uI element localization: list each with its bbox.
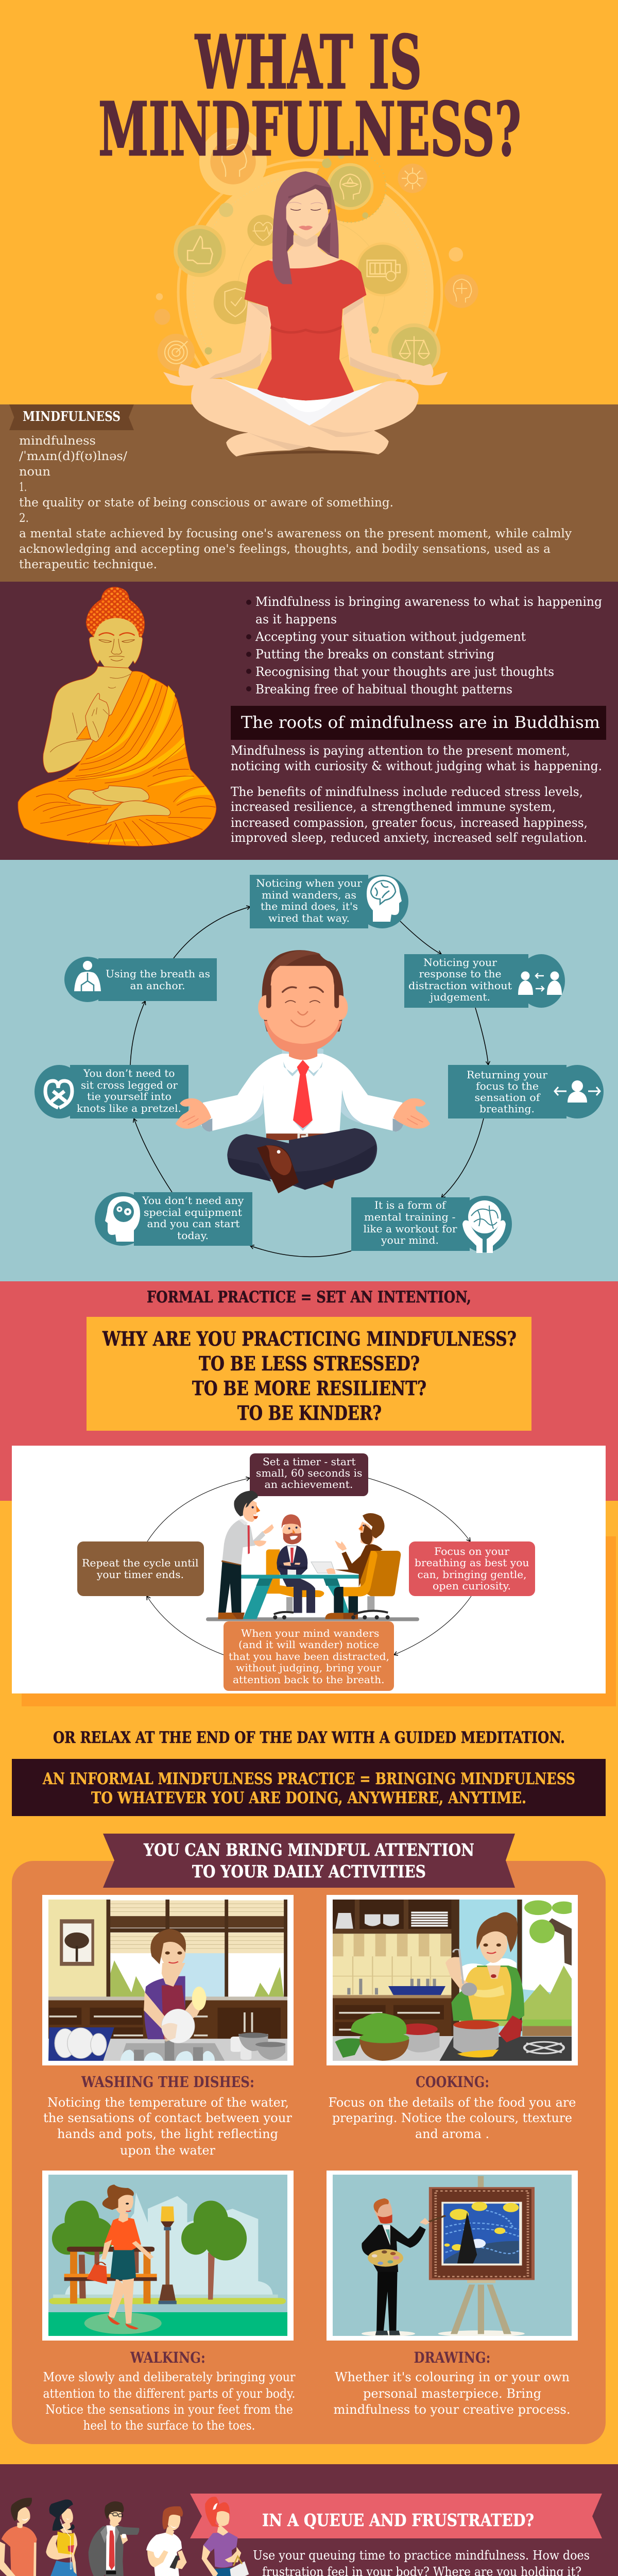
step: no special equipment: today. xyxy=(177,1229,209,1242)
illustration: meditating woman xyxy=(163,172,448,456)
panel: Buddhism section background xyxy=(0,582,618,860)
text block: queue advice: Use your queuing time to practice mindfulness. How does xyxy=(253,2548,590,2563)
text block: dictionary definition: mindfulness xyxy=(19,434,96,448)
step: set a timer: an achievement. xyxy=(265,1478,353,1490)
panel: queue section background xyxy=(0,2464,618,2576)
step: noticing your response: judgement. xyxy=(429,991,490,1003)
step: noticing your response: response to the xyxy=(419,968,502,980)
text: walking: heel to the surface to the toes. xyxy=(83,2418,255,2433)
text block: dictionary definition: /ˈmʌɪn(d)f(ʊ)lnəs/ xyxy=(19,450,127,463)
text: cooking: COOKING: xyxy=(416,2073,489,2091)
icon: person with outward arrows xyxy=(555,1080,600,1103)
list: what mindfulness is: Putting the breaks on constant striving xyxy=(255,647,494,662)
illustration: cooking xyxy=(327,1895,578,2065)
text block: dictionary definition xyxy=(19,434,572,571)
text: cooking: and aroma . xyxy=(415,2127,489,2141)
callout: why are you practicing: TO BE LESS STRESSED? xyxy=(199,1352,420,1375)
banner: daily activities heading xyxy=(103,1834,515,1888)
step: no need to sit cross legged: You don’t need to xyxy=(83,1067,175,1079)
text: washing the dishes xyxy=(43,2073,293,2158)
text block: queue advice xyxy=(252,2548,592,2576)
step: returning your focus: Returning your xyxy=(467,1069,547,1081)
step: no special equipment: special equipment xyxy=(144,1206,242,1218)
step: repeat the cycle: your timer ends. xyxy=(96,1568,184,1581)
step: repeat the cycle xyxy=(77,1541,204,1596)
text block: dictionary definition: 1. xyxy=(19,481,27,494)
step: when your mind wanders: attention back to the breath. xyxy=(233,1673,384,1686)
icon: person with lungs xyxy=(74,961,101,991)
illustration: drawing xyxy=(327,2171,578,2341)
text block: dictionary definition: 2. xyxy=(19,512,29,525)
step: set a timer: Set a timer - start xyxy=(263,1455,355,1468)
panel: yellow lower background xyxy=(0,1501,618,2464)
text: drawing: DRAWING: xyxy=(414,2349,490,2366)
banner: daily activities heading: YOU CAN BRING MINDFUL ATTENTION xyxy=(143,1840,474,1860)
step: using the breath as an anchor: an anchor. xyxy=(130,979,185,992)
text block: mindfulness meaning and benefits: noticing with curiosity & without judging what is happening. xyxy=(231,759,602,773)
step: noticing when your mind wanders: the mind does, it's xyxy=(261,900,358,912)
panel: definition background xyxy=(0,404,618,582)
step: focus on breathing: breathing as best you xyxy=(415,1556,529,1569)
panel: formal practice background xyxy=(0,1281,618,1501)
ribbon: MINDFULNESS xyxy=(9,404,134,430)
panel: orange shadow xyxy=(22,1536,616,1706)
text block: mindfulness meaning and benefits xyxy=(231,743,602,845)
text: washing the dishes: the sensations of contact between your xyxy=(43,2111,293,2125)
step: when your mind wanders: without judging, bring your xyxy=(236,1662,381,1674)
illustration: washing the dishes xyxy=(42,1895,294,2065)
panel: mindfulness cycle background xyxy=(0,860,618,1281)
step: when your mind wanders: (and it will wander) notice xyxy=(238,1638,379,1651)
step: mental training: like a workout for xyxy=(364,1223,457,1235)
person 5 xyxy=(202,2497,249,2576)
text: cooking: Focus on the details of the food you are xyxy=(329,2095,576,2110)
step: returning your focus: sensation of xyxy=(475,1091,541,1104)
text: washing the dishes: Noticing the temperature of the water, xyxy=(47,2095,289,2110)
callout: why are you practicing: TO BE MORE RESILIENT? xyxy=(192,1377,426,1400)
text: drawing: mindfulness to your creative process. xyxy=(334,2402,571,2417)
step: using the breath as an anchor xyxy=(64,957,217,1002)
heading: formal practice: FORMAL PRACTICE = SET AN INTENTION, xyxy=(147,1288,471,1307)
icon: pretzel xyxy=(45,1081,72,1108)
text: drawing: personal masterpiece. Bring xyxy=(363,2386,541,2401)
illustration: Buddha xyxy=(18,587,216,846)
step: set a timer xyxy=(250,1453,368,1496)
title: WHAT IS xyxy=(195,19,422,106)
step: mental training: your mind. xyxy=(381,1234,439,1246)
panel: formal practice cycle xyxy=(12,1446,606,1693)
step: noticing when your mind wanders: Noticing when your xyxy=(256,877,362,889)
list: what mindfulness is xyxy=(246,595,602,697)
heading: roots of mindfulness xyxy=(231,706,606,740)
step: no special equipment xyxy=(95,1192,252,1246)
step: repeat the cycle: Repeat the cycle until xyxy=(82,1557,199,1569)
step: using the breath as an anchor: Using the breath as xyxy=(106,968,210,980)
text block: dictionary definition: the quality or state of being conscious or aware of something. xyxy=(19,496,393,510)
text block: dictionary definition: therapeutic technique. xyxy=(19,558,157,571)
step: noticing when your mind wanders: mind wanders, as xyxy=(262,889,356,901)
step: noticing your response: distraction without xyxy=(408,979,512,992)
step: no need to sit cross legged xyxy=(35,1065,188,1118)
step: no need to sit cross legged: knots like a pretzel. xyxy=(77,1102,181,1114)
text: washing the dishes: WASHING THE DISHES: xyxy=(81,2073,254,2091)
list: what mindfulness is: Recognising that your thoughts are just thoughts xyxy=(255,665,554,679)
callout: why are you practicing: TO BE KINDER? xyxy=(237,1401,382,1425)
step: focus on breathing xyxy=(409,1541,535,1596)
arrows: cycle xyxy=(130,907,488,1257)
text: walking: Move slowly and deliberately bringing your xyxy=(43,2370,296,2384)
text block: mindfulness meaning and benefits: increased compassion, greater focus, increased happiness, xyxy=(231,816,588,830)
text: walking xyxy=(43,2349,296,2433)
text: cooking: preparing. Notice the colours, ttexture xyxy=(332,2111,572,2125)
text block: mindfulness meaning and benefits: Mindfulness is paying attention to the present moment, xyxy=(231,743,570,758)
step: focus on breathing: open curiosity. xyxy=(433,1580,511,1592)
illustration: people in a queue xyxy=(0,2497,249,2576)
text: drawing: Whether it's colouring in or your own xyxy=(335,2370,570,2384)
step: focus on breathing: can, bringing gentle, xyxy=(417,1568,526,1581)
background: yellow header xyxy=(0,0,618,404)
callout: informal practice: TO WHATEVER YOU ARE DOING, ANYWHERE, ANYTIME. xyxy=(91,1789,526,1807)
step: mental training: It is a form of xyxy=(374,1199,447,1211)
banner: daily activities heading: TO YOUR DAILY ACTIVITIES xyxy=(192,1861,426,1882)
list: what mindfulness is: Mindfulness is bringing awareness to what is happening xyxy=(255,595,602,609)
step: when your mind wanders: that you have been distracted, xyxy=(229,1650,389,1663)
text: walking: attention to the different parts of your body. xyxy=(43,2386,296,2401)
halo circles behind the woman xyxy=(154,128,478,423)
step: noticing your response: Noticing your xyxy=(423,956,497,969)
ribbon: in a queue and frustrated: IN A QUEUE AND FRUSTRATED? xyxy=(262,2510,534,2530)
step: returning your focus: focus to the xyxy=(476,1080,539,1092)
step: no need to sit cross legged: tie yourself into xyxy=(87,1090,171,1103)
step: when your mind wanders xyxy=(224,1621,394,1691)
arrows: practice cycle xyxy=(147,1478,471,1655)
title xyxy=(98,19,521,173)
icon: head with brain xyxy=(367,876,402,922)
text: drawing xyxy=(334,2349,571,2417)
person 4 xyxy=(145,2506,187,2576)
person 1 xyxy=(0,2498,46,2576)
text block: dictionary definition: acknowledging and accepting one's feelings, thoughts, and bodily sensations, used as a xyxy=(19,543,551,556)
step: no need to sit cross legged: sit cross legged or xyxy=(81,1079,178,1091)
step: set a timer: small, 60 seconds is xyxy=(256,1467,363,1479)
text: walking: WALKING: xyxy=(130,2349,205,2366)
text: washing the dishes: hands and pots, the light reflecting xyxy=(57,2127,278,2141)
list: what mindfulness is: Breaking free of habitual thought patterns xyxy=(255,682,512,697)
illustration: walking xyxy=(42,2171,294,2341)
illustration: meditating businessman xyxy=(176,950,430,1193)
icon: two people with arrows xyxy=(518,972,562,995)
text: cooking xyxy=(329,2073,576,2141)
step: mental training xyxy=(351,1196,512,1253)
text block: mindfulness meaning and benefits: The benefits of mindfulness include reduced stress levels, xyxy=(231,785,583,799)
icon: head with gears xyxy=(105,1196,140,1242)
icon: hands holding brain xyxy=(462,1200,506,1253)
step: returning your focus xyxy=(448,1065,604,1118)
step: mental training: mental training - xyxy=(364,1211,455,1223)
callout: why are you practicing xyxy=(87,1317,531,1431)
step: noticing when your mind wanders xyxy=(250,875,408,928)
step: focus on breathing: Focus on your xyxy=(434,1545,509,1557)
heading: roots of mindfulness: The roots of mindfulness are in Buddhism xyxy=(241,713,600,732)
step: no special equipment: and you can start xyxy=(147,1217,240,1230)
text: walking: Notice the sensations in your feet from the xyxy=(45,2402,293,2417)
ribbon: in a queue and frustrated xyxy=(190,2494,602,2538)
step: noticing your response xyxy=(404,954,565,1008)
ribbon: MINDFULNESS: MINDFULNESS xyxy=(23,409,121,425)
text block: mindfulness meaning and benefits: improved sleep, reduced anxiety, increased self regulation. xyxy=(231,831,587,845)
list: what mindfulness is: as it happens xyxy=(255,612,337,626)
person 2 xyxy=(46,2499,77,2576)
panel: daily activities xyxy=(12,1861,606,2444)
text block: dictionary definition: noun xyxy=(19,465,50,479)
callout: why are you practicing: WHY ARE YOU PRACTICING MINDFULNESS? xyxy=(102,1327,517,1350)
callout: informal practice xyxy=(12,1759,606,1816)
text: washing the dishes: upon the water xyxy=(120,2143,216,2158)
step: noticing when your mind wanders: wired that way. xyxy=(268,912,350,924)
person 3 xyxy=(87,2501,139,2576)
step: returning your focus: breathing. xyxy=(479,1103,535,1115)
step: no special equipment: You don’t need any xyxy=(142,1194,244,1207)
text block: mindfulness meaning and benefits: increased resilience, a strengthened immune system, xyxy=(231,800,556,814)
list: what mindfulness is: Accepting your situation without judgement xyxy=(255,630,526,644)
step: when your mind wanders: When your mind wanders xyxy=(241,1627,379,1639)
text block: dictionary definition: a mental state achieved by focusing one's awareness on the present moment, while calmly xyxy=(19,527,572,540)
illustration: three colleagues at a table xyxy=(206,1490,419,1621)
